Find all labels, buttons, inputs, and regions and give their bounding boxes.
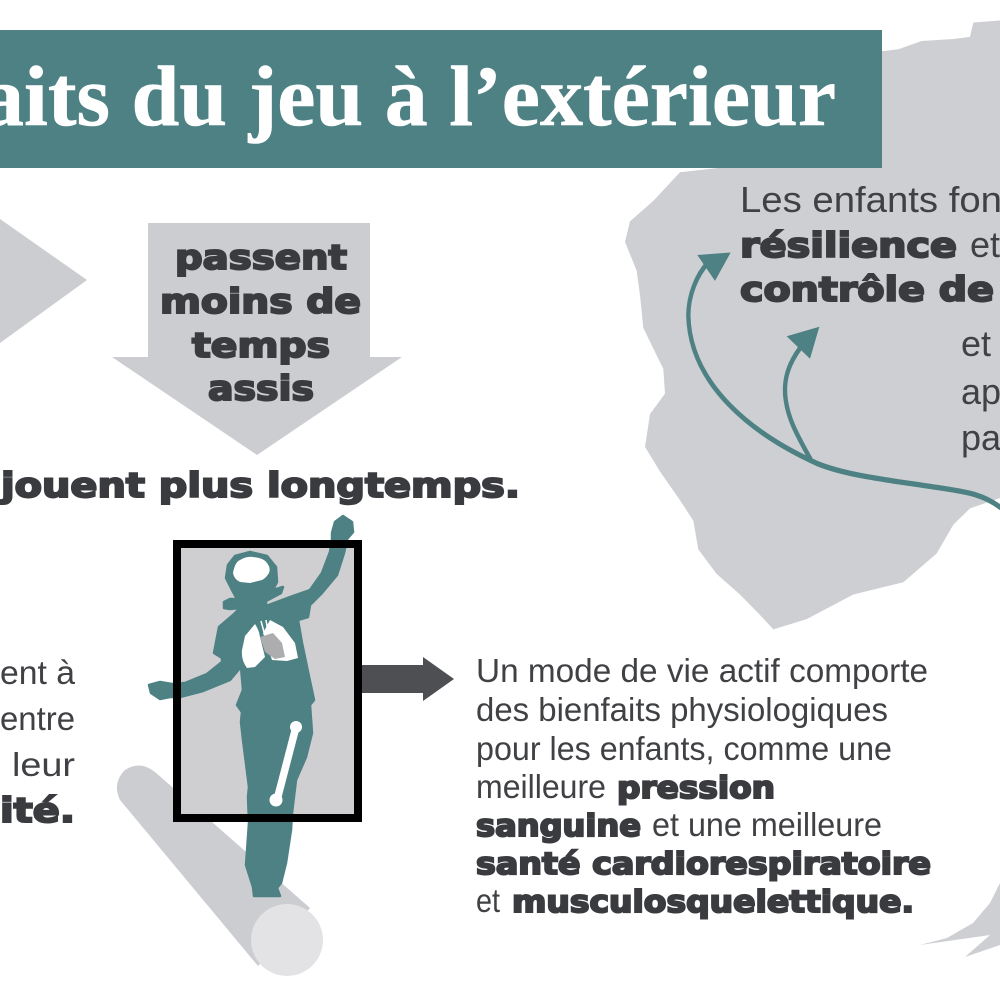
paragraph: resilience: ap bbox=[961, 371, 1000, 412]
down arrow: passent moins de temps assis: passent bbox=[175, 238, 347, 278]
statement: jouent plus longtemps: jouent plus longtemps. bbox=[0, 466, 520, 506]
paragraph: physiological benefits bbox=[476, 652, 931, 920]
down arrow: passent moins de temps assis: temps bbox=[192, 326, 330, 366]
frame background bbox=[173, 540, 362, 822]
paragraph: resilience: et bbox=[970, 224, 1000, 265]
log bbox=[117, 765, 323, 976]
paragraph: resilience: Les enfants fon bbox=[740, 179, 1000, 220]
left text fragment bbox=[0, 654, 76, 831]
right arrow shape, partial bbox=[0, 219, 87, 343]
left text fragment: ité. bbox=[0, 791, 75, 831]
trachea bbox=[261, 620, 268, 632]
paragraph: physiological benefits: et bbox=[476, 882, 500, 919]
paragraph: resilience: résilience bbox=[740, 226, 957, 266]
down arrow: passent moins de temps assis: assis bbox=[208, 369, 314, 409]
paragraph: physiological benefits: pour les enfants, comme une bbox=[476, 730, 892, 767]
thigh bone bbox=[270, 721, 302, 806]
paragraph: physiological benefits: santé cardiorespiratoire bbox=[476, 847, 931, 882]
left text fragment: leur bbox=[12, 746, 75, 783]
brain bbox=[233, 557, 270, 583]
paragraph: physiological benefits: meilleure bbox=[476, 768, 606, 805]
paragraph: physiological benefits: et une meilleure bbox=[652, 806, 882, 843]
heart bbox=[260, 633, 285, 659]
child silhouette with organs bbox=[149, 516, 353, 896]
down arrow: passent moins de temps assis: moins de bbox=[160, 282, 361, 322]
dark arrow to text bbox=[362, 657, 454, 701]
teal branching arrows bbox=[688, 253, 1000, 508]
title banner bbox=[0, 30, 882, 168]
paragraph: physiological benefits: des bienfaits physiologiques bbox=[476, 691, 888, 728]
paragraph: resilience: pa bbox=[961, 417, 1000, 458]
paragraph: physiological benefits: pression bbox=[617, 771, 775, 806]
paragraph: physiological benefits: Un mode de vie actif comporte bbox=[476, 652, 928, 689]
left text fragment: ent à bbox=[0, 654, 76, 691]
paragraph: physiological benefits: sanguine bbox=[476, 809, 641, 844]
left text fragment: entre bbox=[0, 700, 75, 737]
lungs bbox=[242, 620, 298, 668]
tree silhouette background bbox=[625, 20, 1000, 629]
down arrow: passent moins de temps assis bbox=[112, 223, 402, 455]
paragraph: physiological benefits: musculosquelettique. bbox=[512, 885, 914, 920]
paragraph: resilience bbox=[740, 179, 1000, 458]
frame border bbox=[177, 544, 358, 818]
paragraph: resilience: et bbox=[961, 323, 991, 364]
paragraph: resilience: contrôle de bbox=[740, 270, 994, 310]
tree root silhouette bbox=[920, 883, 1000, 957]
